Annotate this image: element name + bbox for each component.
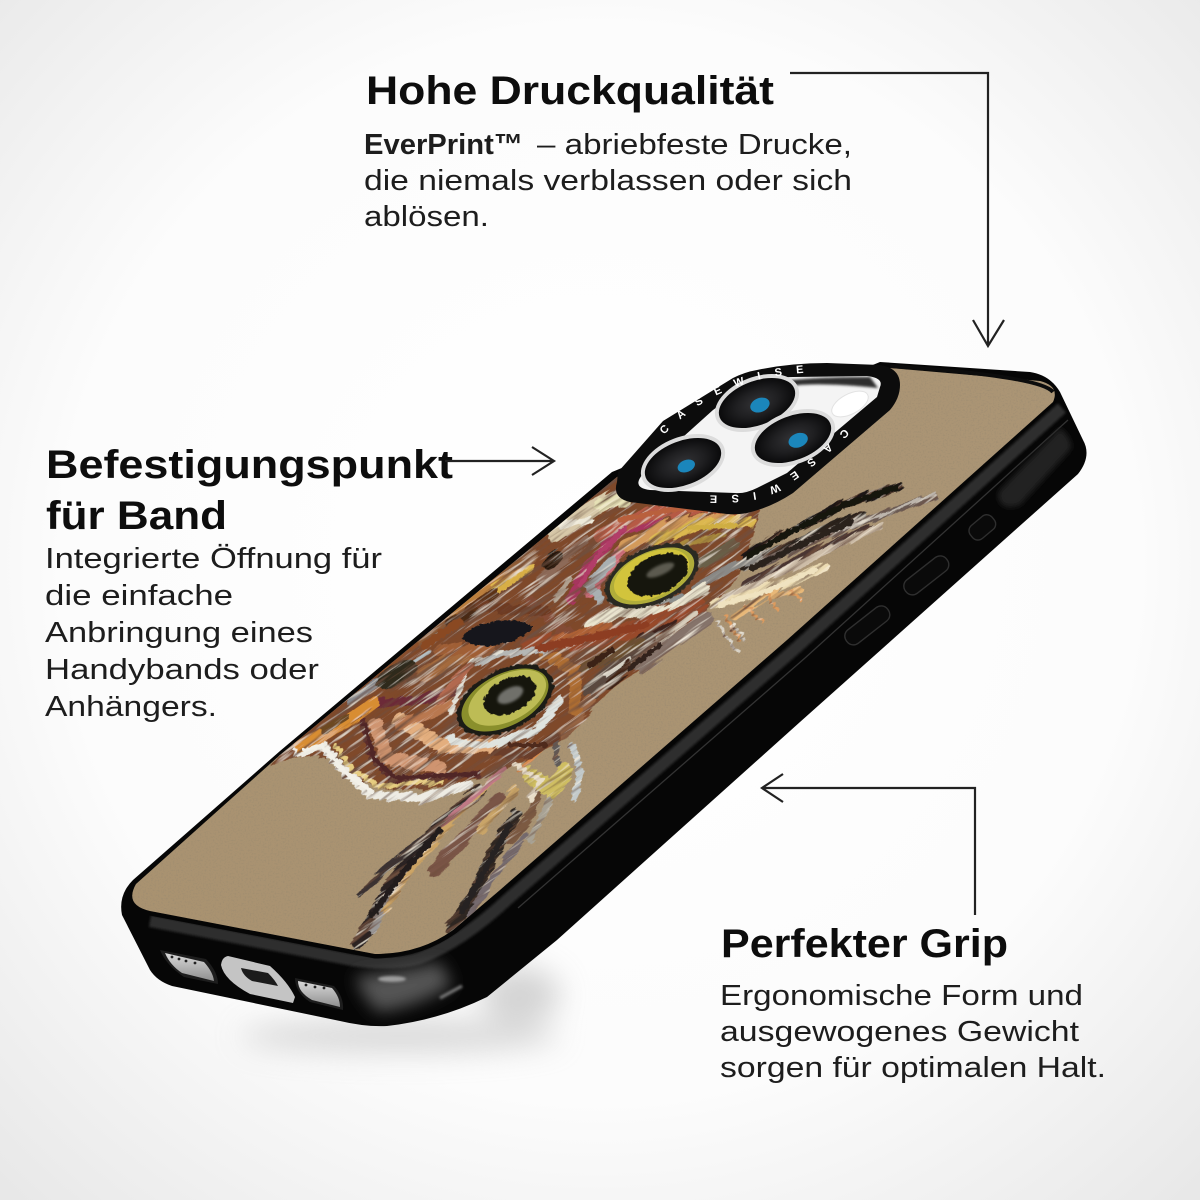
crisp overlay strokes	[305, 488, 895, 915]
face strokes	[425, 498, 760, 755]
description: Anhängers.	[45, 691, 217, 723]
right speaker	[295, 978, 343, 1010]
description: Anbringung eines	[45, 617, 313, 649]
heading	[46, 443, 453, 538]
description: Handybands oder	[45, 654, 319, 686]
face bottom outline	[298, 622, 490, 798]
description: die einfache	[45, 580, 233, 612]
corner glint	[378, 976, 406, 982]
bottom ports	[160, 950, 343, 1010]
paper background	[132, 368, 1055, 954]
camera window	[638, 376, 881, 493]
top edge line	[890, 366, 1053, 392]
description: EverPrint™	[364, 129, 523, 161]
description	[364, 129, 852, 233]
usb port	[221, 956, 295, 1003]
ring lettering lower: CASEWISE	[710, 430, 848, 503]
phone case	[121, 362, 1086, 1026]
lens top	[707, 363, 807, 443]
arrow: print quality	[790, 73, 1004, 346]
owl head	[270, 450, 760, 790]
arrow: grip	[762, 774, 975, 915]
phone shadow	[240, 967, 560, 1052]
callout: strap point	[45, 443, 453, 723]
description: die niemals verblassen oder sich	[364, 165, 852, 197]
lens right	[743, 398, 843, 478]
ring lettering upper: CASEWISE	[660, 365, 804, 434]
side rim sheen	[150, 408, 1062, 963]
bottom corner highlight	[356, 962, 452, 1012]
heading: Hohe Druckqualität	[366, 69, 774, 113]
lens left	[633, 423, 733, 503]
corner streak	[440, 986, 462, 998]
description: ablösen.	[364, 201, 489, 233]
description: Integrierte Öffnung für	[45, 543, 382, 575]
lower feather tufts	[358, 735, 580, 945]
heading: für Band	[46, 494, 227, 538]
heading: Befestigungspunkt	[46, 443, 453, 487]
description: Ergonomische Form und	[720, 980, 1083, 1012]
callout: grip	[720, 922, 1106, 1084]
back print	[132, 368, 1055, 954]
painted owl texture	[270, 476, 939, 950]
camera ring	[616, 363, 900, 514]
side rim line	[518, 420, 1068, 908]
arrow: strap point	[445, 447, 554, 475]
callout: print quality	[364, 69, 852, 233]
right corner band	[998, 428, 1071, 507]
dark face spots	[372, 547, 567, 695]
camera island	[616, 363, 900, 514]
description: ausgewogenes Gewicht	[720, 1016, 1079, 1048]
heading: Perfekter Grip	[721, 922, 1008, 966]
window shade	[750, 377, 878, 388]
lower eye	[456, 664, 556, 736]
inner black edge	[150, 400, 1055, 956]
side buttons	[842, 512, 999, 648]
description	[720, 980, 1106, 1084]
description: – abriebfeste Drucke,	[537, 129, 852, 161]
upper eye	[604, 542, 700, 610]
case body	[121, 362, 1087, 1026]
description: sorgen für optimalen Halt.	[720, 1052, 1106, 1084]
owl artwork	[270, 476, 939, 950]
flash	[828, 386, 872, 422]
owl beak	[462, 621, 533, 646]
left speaker	[160, 950, 218, 984]
description	[45, 543, 382, 723]
upper feather tuft	[715, 486, 935, 652]
